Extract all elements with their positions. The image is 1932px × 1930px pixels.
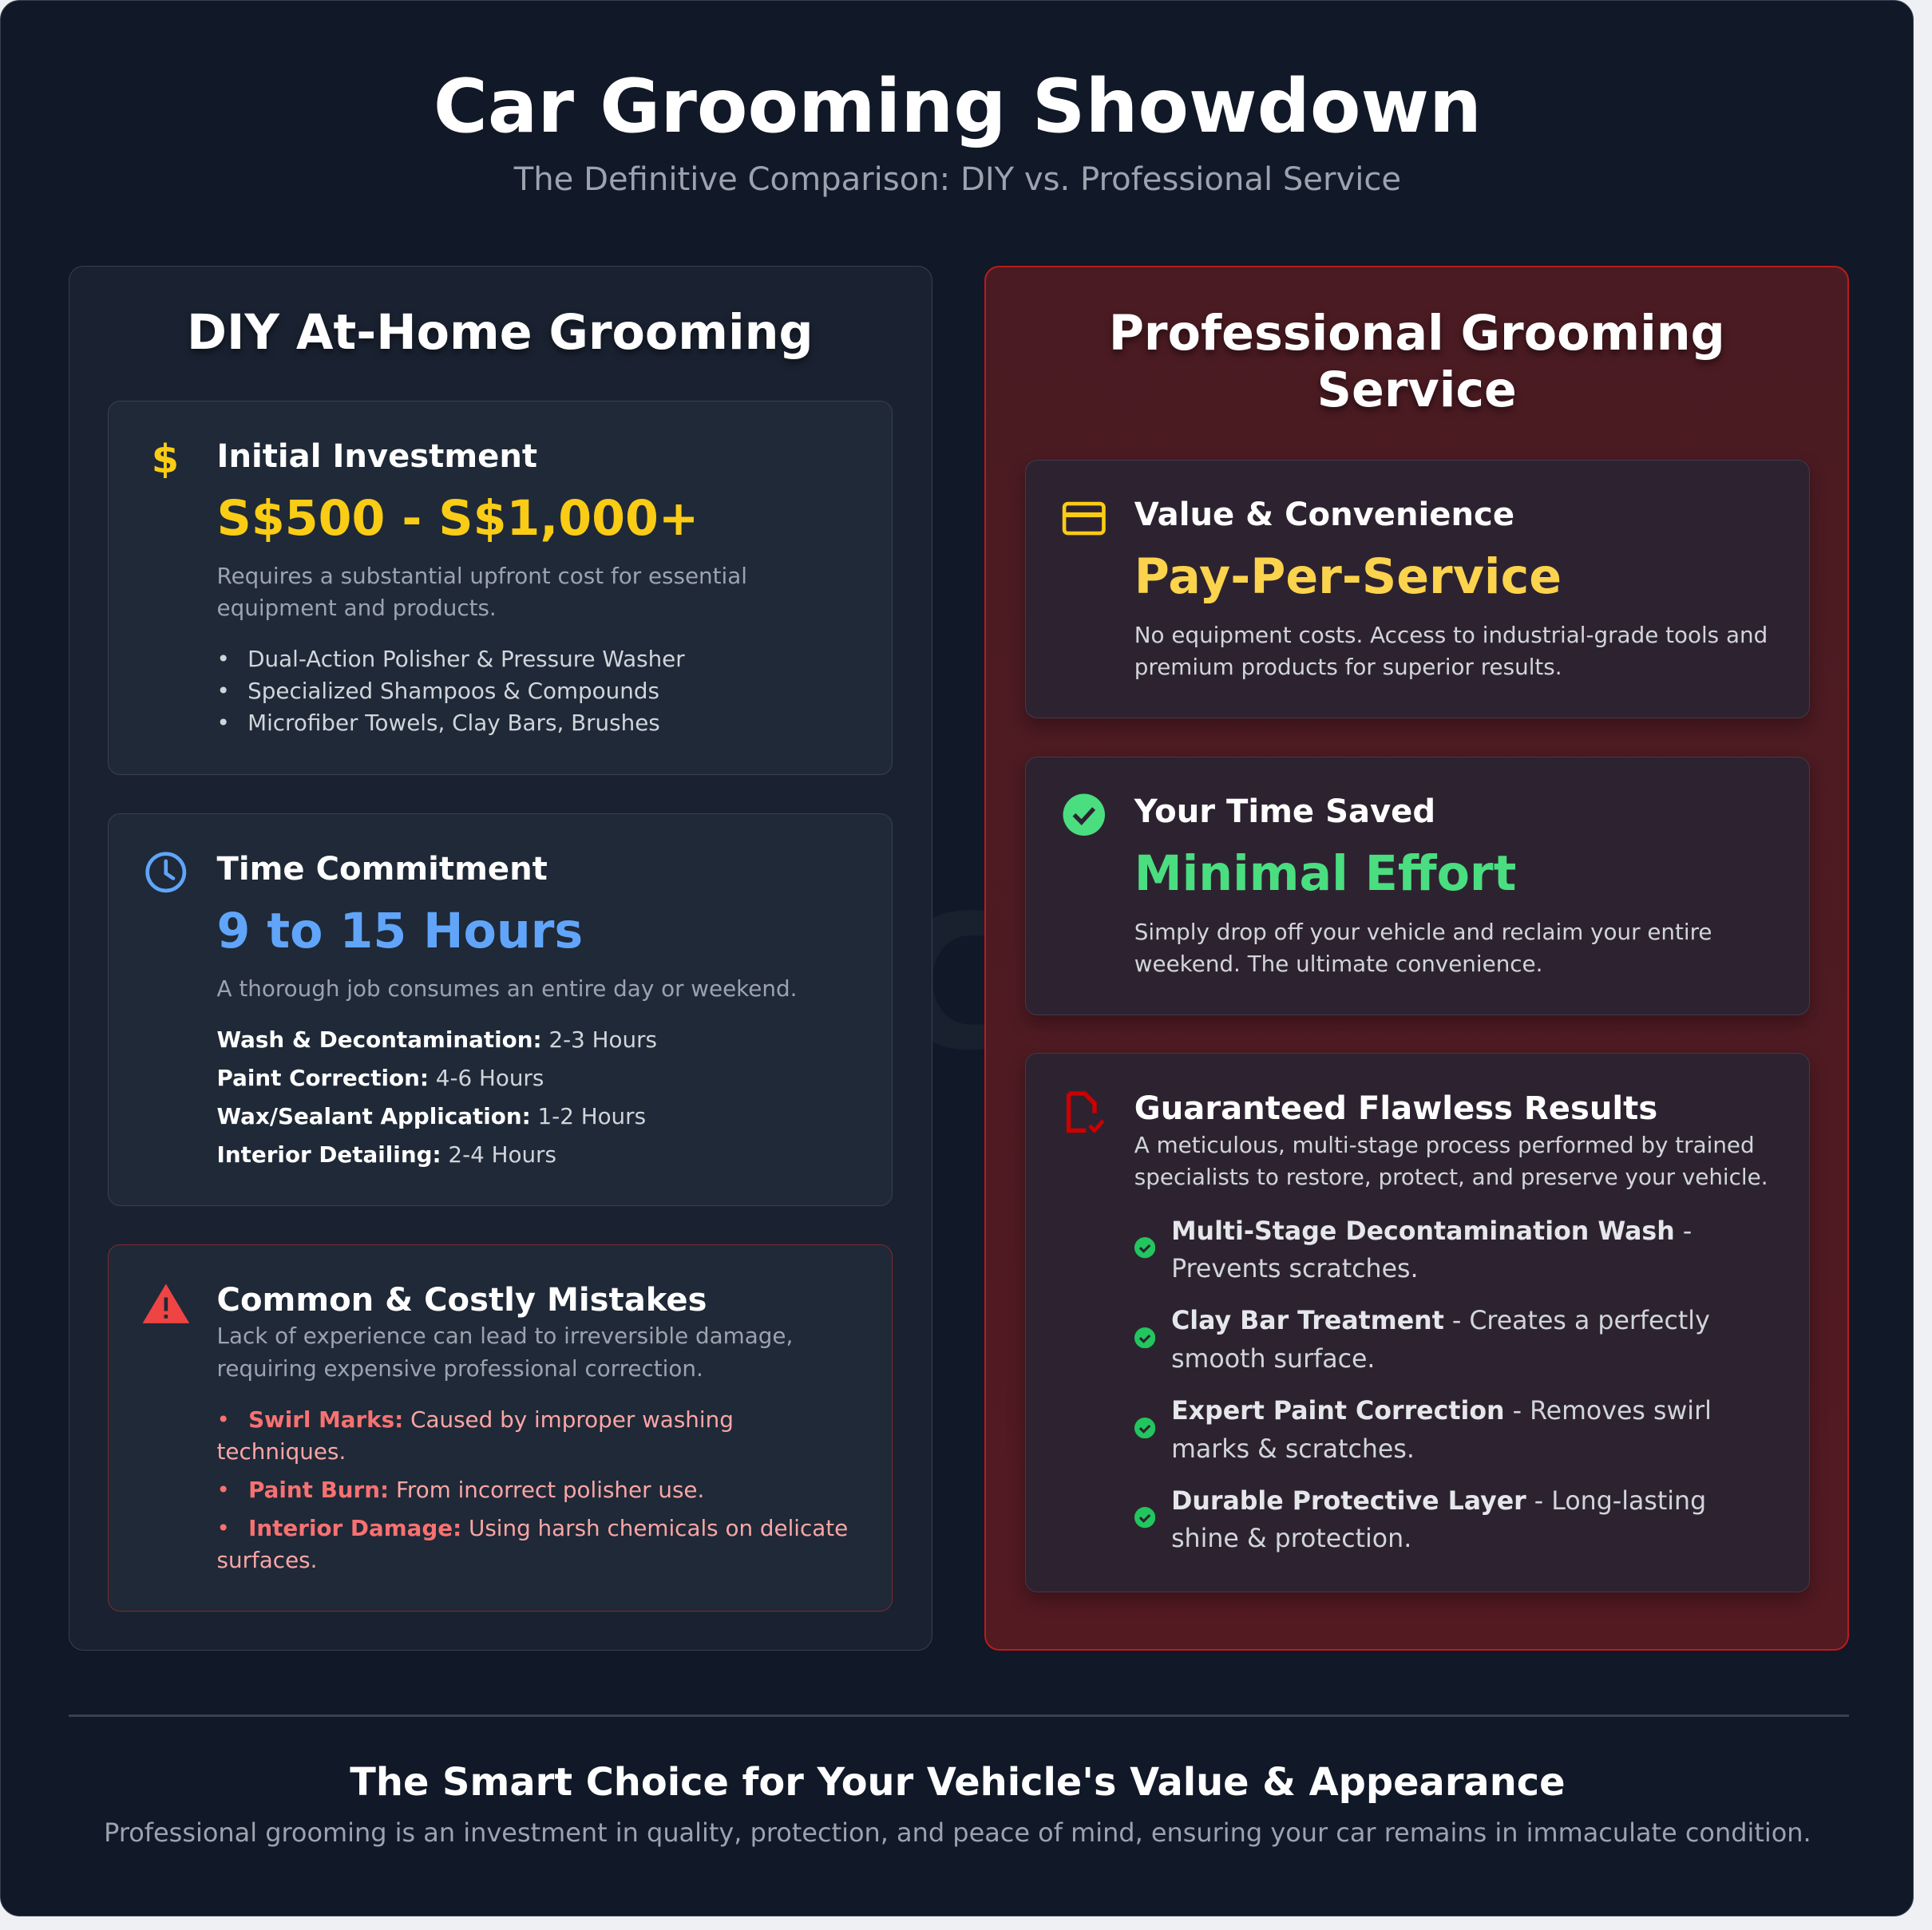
footer text: Professional grooming is an investment in quality, protection, and peace of mind, ensuring your car remains in immaculate condition.	[104, 1817, 1811, 1848]
card: time commitment	[108, 813, 893, 1206]
time breakdown: Wax/Sealant Application: 1-2 Hours	[217, 1103, 646, 1129]
subtitle: The Definitive Comparison: DIY vs. Professional Service	[514, 161, 1401, 198]
bullet list: Microfiber Towels, Clay Bars, Brushes	[247, 710, 660, 736]
icon: check circle	[1063, 793, 1105, 836]
title: Car Grooming Showdown	[434, 63, 1482, 149]
card: value	[1025, 460, 1810, 718]
card: guaranteed results	[1025, 1053, 1810, 1592]
time breakdown: Wash & Decontamination: 2-3 Hours	[217, 1026, 657, 1053]
heading: DIY: DIY At-Home Grooming	[187, 305, 814, 361]
heading: Professional: Professional Grooming	[1109, 306, 1725, 362]
value: 9 to 15 Hours	[217, 904, 583, 959]
bullet list: Dual-Action Polisher & Pressure Washer	[247, 646, 685, 672]
icon: warning	[142, 1283, 190, 1323]
card title: Time Commitment	[217, 851, 548, 888]
icon: dollar: $	[152, 436, 179, 482]
card title: Your Time Saved	[1134, 793, 1435, 830]
card: mistakes	[108, 1244, 893, 1612]
description: Requires a substantial upfront cost for essential equipment and products.	[217, 563, 747, 621]
time breakdown	[217, 1026, 657, 1168]
time breakdown: Paint Correction: 4-6 Hours	[217, 1065, 544, 1091]
card title: Guaranteed Flawless Results	[1134, 1090, 1657, 1127]
description: A meticulous, multi-stage process performed by trained specialists to restore, protect, and preserve your vehicle.	[1134, 1132, 1768, 1190]
value: S$500 - S$1,000+	[217, 491, 699, 547]
bullet list: Specialized Shampoos & Compounds	[247, 678, 659, 704]
description: A thorough job consumes an entire day or weekend.	[217, 975, 797, 1002]
card title: Value & Convenience	[1134, 496, 1514, 533]
time breakdown: Interior Detailing: 2-4 Hours	[217, 1141, 556, 1168]
panel: DIY	[69, 266, 932, 1651]
card: time saved	[1025, 757, 1810, 1015]
description: No equipment costs. Access to industrial-grade tools and premium products for superior results.	[1134, 622, 1768, 680]
checklist	[1134, 1217, 1712, 1553]
value: Minimal Effort	[1134, 846, 1516, 902]
mistakes list: Paint Burn: From incorrect polisher use.	[248, 1477, 704, 1503]
footer heading: The Smart Choice for Your Vehicle's Value & Appearance	[350, 1761, 1566, 1805]
mistakes list	[217, 1406, 848, 1573]
card: initial investment	[108, 401, 893, 775]
card title: Common & Costly Mistakes	[217, 1282, 707, 1319]
bullet list	[220, 646, 685, 736]
icon: document check	[1067, 1091, 1105, 1133]
mistakes list: Interior Damage: Using harsh chemicals on delicate surfaces.	[217, 1515, 848, 1573]
heading: Professional: Service	[1317, 362, 1517, 418]
icon: clock	[145, 852, 187, 892]
card title: Initial Investment	[217, 438, 537, 475]
checklist: Durable Protective Layer - Long-lasting shine & protection.	[1171, 1487, 1706, 1553]
checklist: Clay Bar Treatment - Creates a perfectly smooth surface.	[1171, 1307, 1710, 1374]
icon: card	[1062, 501, 1106, 535]
mistakes list: Swirl Marks: Caused by improper washing techniques.	[217, 1406, 734, 1465]
heading: Professional	[1109, 306, 1725, 418]
value: Pay-Per-Service	[1134, 549, 1562, 605]
checklist: Expert Paint Correction - Removes swirl marks & scratches.	[1171, 1397, 1712, 1464]
description: Lack of experience can lead to irreversible damage, requiring expensive professional correction.	[217, 1323, 793, 1381]
checklist: Multi-Stage Decontamination Wash - Prevents scratches.	[1171, 1217, 1692, 1283]
watermark: Company	[888, 876, 1852, 1091]
panel: Professional	[984, 266, 1849, 1651]
description: Simply drop off your vehicle and reclaim your entire weekend. The ultimate convenience.	[1134, 919, 1712, 977]
